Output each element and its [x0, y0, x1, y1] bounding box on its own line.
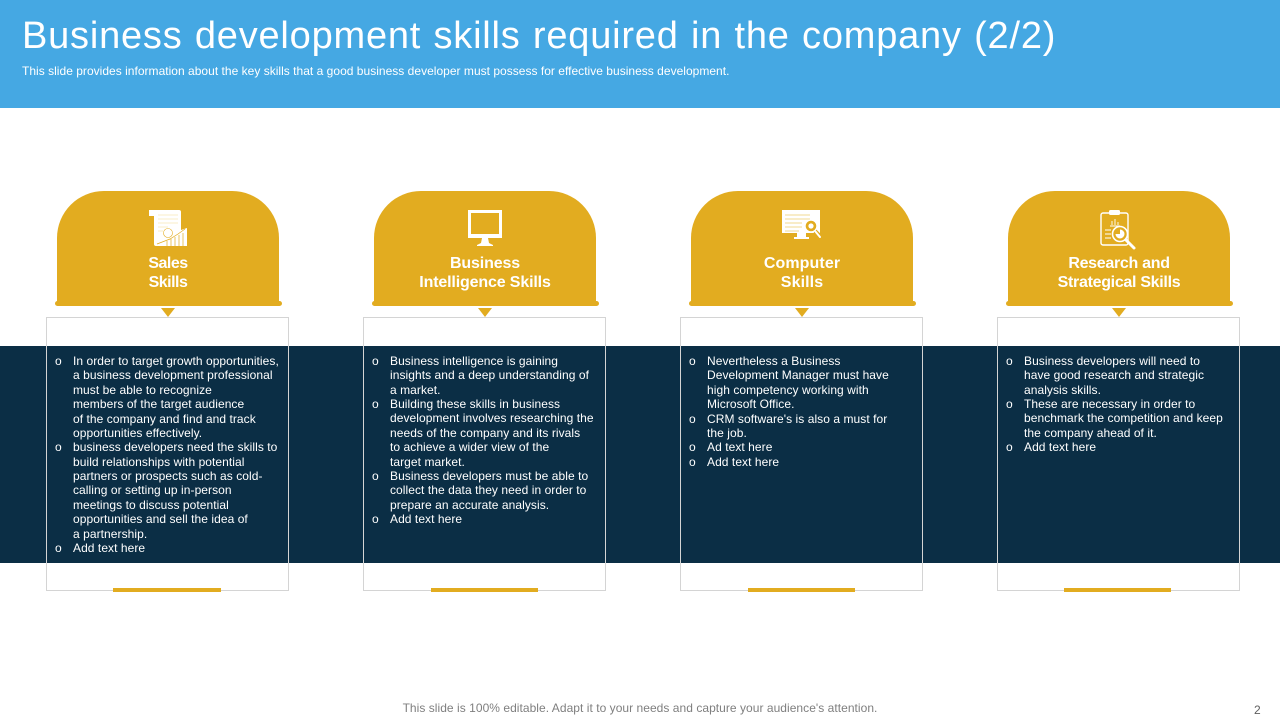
bullet list: business intelligence: insights and a deep understanding of [390, 368, 589, 382]
bullet list: computer skills: Nevertheless a Business [707, 354, 840, 368]
subtitle: This slide provides information about the key skills that a good business developer must possess for effective business development. [22, 64, 729, 78]
pointer triangle [161, 308, 175, 317]
bullet list: computer skills: CRM software's is also a must for [707, 412, 887, 426]
bullet list: sales skills [55, 354, 279, 555]
bullet list: research and strategical: benchmark the competition and keep [1024, 411, 1223, 425]
heading: business intelligence: Business [450, 255, 520, 272]
bullet list: sales skills: Add text here [73, 541, 145, 555]
icon: desktop monitor [468, 210, 502, 246]
pointer triangle [478, 308, 492, 317]
accent bar [748, 588, 855, 592]
bullet list: computer skills [689, 354, 889, 469]
tab base bar [372, 301, 599, 306]
bullet list: business intelligence: target market. [390, 455, 465, 469]
panel: business intelligence skills [363, 191, 606, 592]
page number: 2 [1254, 703, 1261, 717]
heading: research and strategical: Research and [1068, 255, 1170, 272]
accent bar [1064, 588, 1171, 592]
bullet list: computer skills: o [689, 455, 696, 469]
bullet list: research and strategical: o [1006, 397, 1013, 411]
bullet list: computer skills: Add text here [707, 455, 779, 469]
panel: research and strategical skills [997, 191, 1240, 592]
panel: sales skills [46, 191, 289, 592]
bullet list: sales skills: o [55, 440, 62, 454]
bullet list: sales skills: opportunities effectively. [73, 426, 202, 440]
bullet list: business intelligence: collect the data they need in order to [390, 483, 586, 497]
bullet list: business intelligence: development involves researching the [390, 411, 594, 425]
icon: financial report scroll [149, 210, 187, 246]
bullet list: research and strategical: o [1006, 440, 1013, 454]
bullet list: computer skills: Development Manager must have [707, 368, 889, 382]
header tab: computer skills [691, 191, 913, 305]
heading: computer skills [764, 255, 840, 291]
tab base bar [689, 301, 916, 306]
bullet list: research and strategical: Business developers will need to [1024, 354, 1200, 368]
bullet list: sales skills: o [55, 541, 62, 555]
bullet list: research and strategical: the company ahead of it. [1024, 426, 1157, 440]
bullet list: computer skills: o [689, 440, 696, 454]
heading: sales skills [148, 255, 188, 291]
bullet list: business intelligence: a market. [390, 383, 441, 397]
bullet list: business intelligence: Business intelligence is gaining [390, 354, 558, 368]
bullet list: research and strategical: analysis skills. [1024, 383, 1101, 397]
bullet list: research and strategical: have good research and strategic [1024, 368, 1204, 382]
heading: research and strategical: Strategical Skills [1058, 274, 1180, 291]
footer note: This slide is 100% editable. Adapt it to your needs and capture your audience's attention. [403, 701, 877, 715]
bullet list: sales skills: must be able to recognize [73, 383, 212, 397]
panel: computer skills [680, 191, 923, 592]
bullet list: sales skills: of the company and find and track [73, 412, 256, 426]
bullet list: research and strategical: Add text here [1024, 440, 1096, 454]
heading: sales skills: Skills [149, 274, 187, 291]
icon: monitor with gear and magnifier [782, 210, 821, 239]
bullet list: computer skills: the job. [707, 426, 747, 440]
content box outline [363, 317, 606, 591]
bullet list: computer skills: o [689, 354, 696, 368]
header tab: research and strategical [1008, 191, 1230, 305]
pointer triangle [795, 308, 809, 317]
bullet list: business intelligence: needs of the company and its rivals [390, 426, 580, 440]
header tab: sales skills [57, 191, 279, 305]
heading: sales skills: Sales [148, 255, 188, 272]
bullet list: business intelligence: o [372, 469, 379, 483]
content box outline [46, 317, 289, 591]
bullet list: sales skills: build relationships with potential [73, 455, 244, 469]
icon: clipboard with magnifier [1100, 210, 1136, 250]
accent bar [113, 588, 221, 592]
bullet list: business intelligence: to achieve a wider view of the [390, 440, 549, 454]
bullet list: research and strategical [1006, 354, 1223, 454]
bullet list: computer skills: o [689, 412, 696, 426]
bullet list: sales skills: meetings to discuss potential [73, 498, 229, 512]
title: Business development skills required in the company (2/2) [22, 15, 1056, 57]
pointer triangle [1112, 308, 1126, 317]
bullet list: sales skills: In order to target growth opportunities, [73, 354, 279, 368]
bullet list: business intelligence: prepare an accurate analysis. [390, 498, 549, 512]
bullet list: sales skills: a business development professional [73, 368, 273, 382]
bullet list: sales skills: calling or setting up in-person [73, 483, 232, 497]
content box outline [680, 317, 923, 591]
bullet list: sales skills: opportunities and sell the idea of [73, 512, 248, 526]
tab base bar [1006, 301, 1233, 306]
heading: computer skills: Skills [781, 274, 823, 291]
bullet list: business intelligence: Business developers must be able to [390, 469, 588, 483]
bullet list: sales skills: o [55, 354, 62, 368]
bullet list: sales skills: a partnership. [73, 527, 147, 541]
bullet list: sales skills: members of the target audience [73, 397, 244, 411]
content box outline [997, 317, 1240, 591]
bullet list: computer skills: high competency working with [707, 383, 869, 397]
header banner [0, 0, 1280, 108]
heading: business intelligence [419, 255, 551, 291]
bullet list: computer skills: Microsoft Office. [707, 397, 794, 411]
dark horizontal band [0, 346, 1280, 563]
bullet list: business intelligence: o [372, 397, 379, 411]
heading: computer skills: Computer [764, 255, 840, 272]
accent bar [431, 588, 538, 592]
bullet list: business intelligence [372, 354, 594, 526]
bullet list: research and strategical: These are necessary in order to [1024, 397, 1195, 411]
bullet list: computer skills: Ad text here [707, 440, 772, 454]
heading: business intelligence: Intelligence Skills [419, 274, 551, 291]
bullet list: business intelligence: Building these skills in business [390, 397, 560, 411]
header tab: business intelligence [374, 191, 596, 305]
bullet list: sales skills: business developers need the skills to [73, 440, 277, 454]
tab base bar [55, 301, 282, 306]
bullet list: sales skills: partners or prospects such as cold- [73, 469, 263, 483]
bullet list: research and strategical: o [1006, 354, 1013, 368]
bullet list: business intelligence: Add text here [390, 512, 462, 526]
heading: research and strategical [1058, 255, 1180, 291]
bullet list: business intelligence: o [372, 512, 379, 526]
bullet list: business intelligence: o [372, 354, 379, 368]
